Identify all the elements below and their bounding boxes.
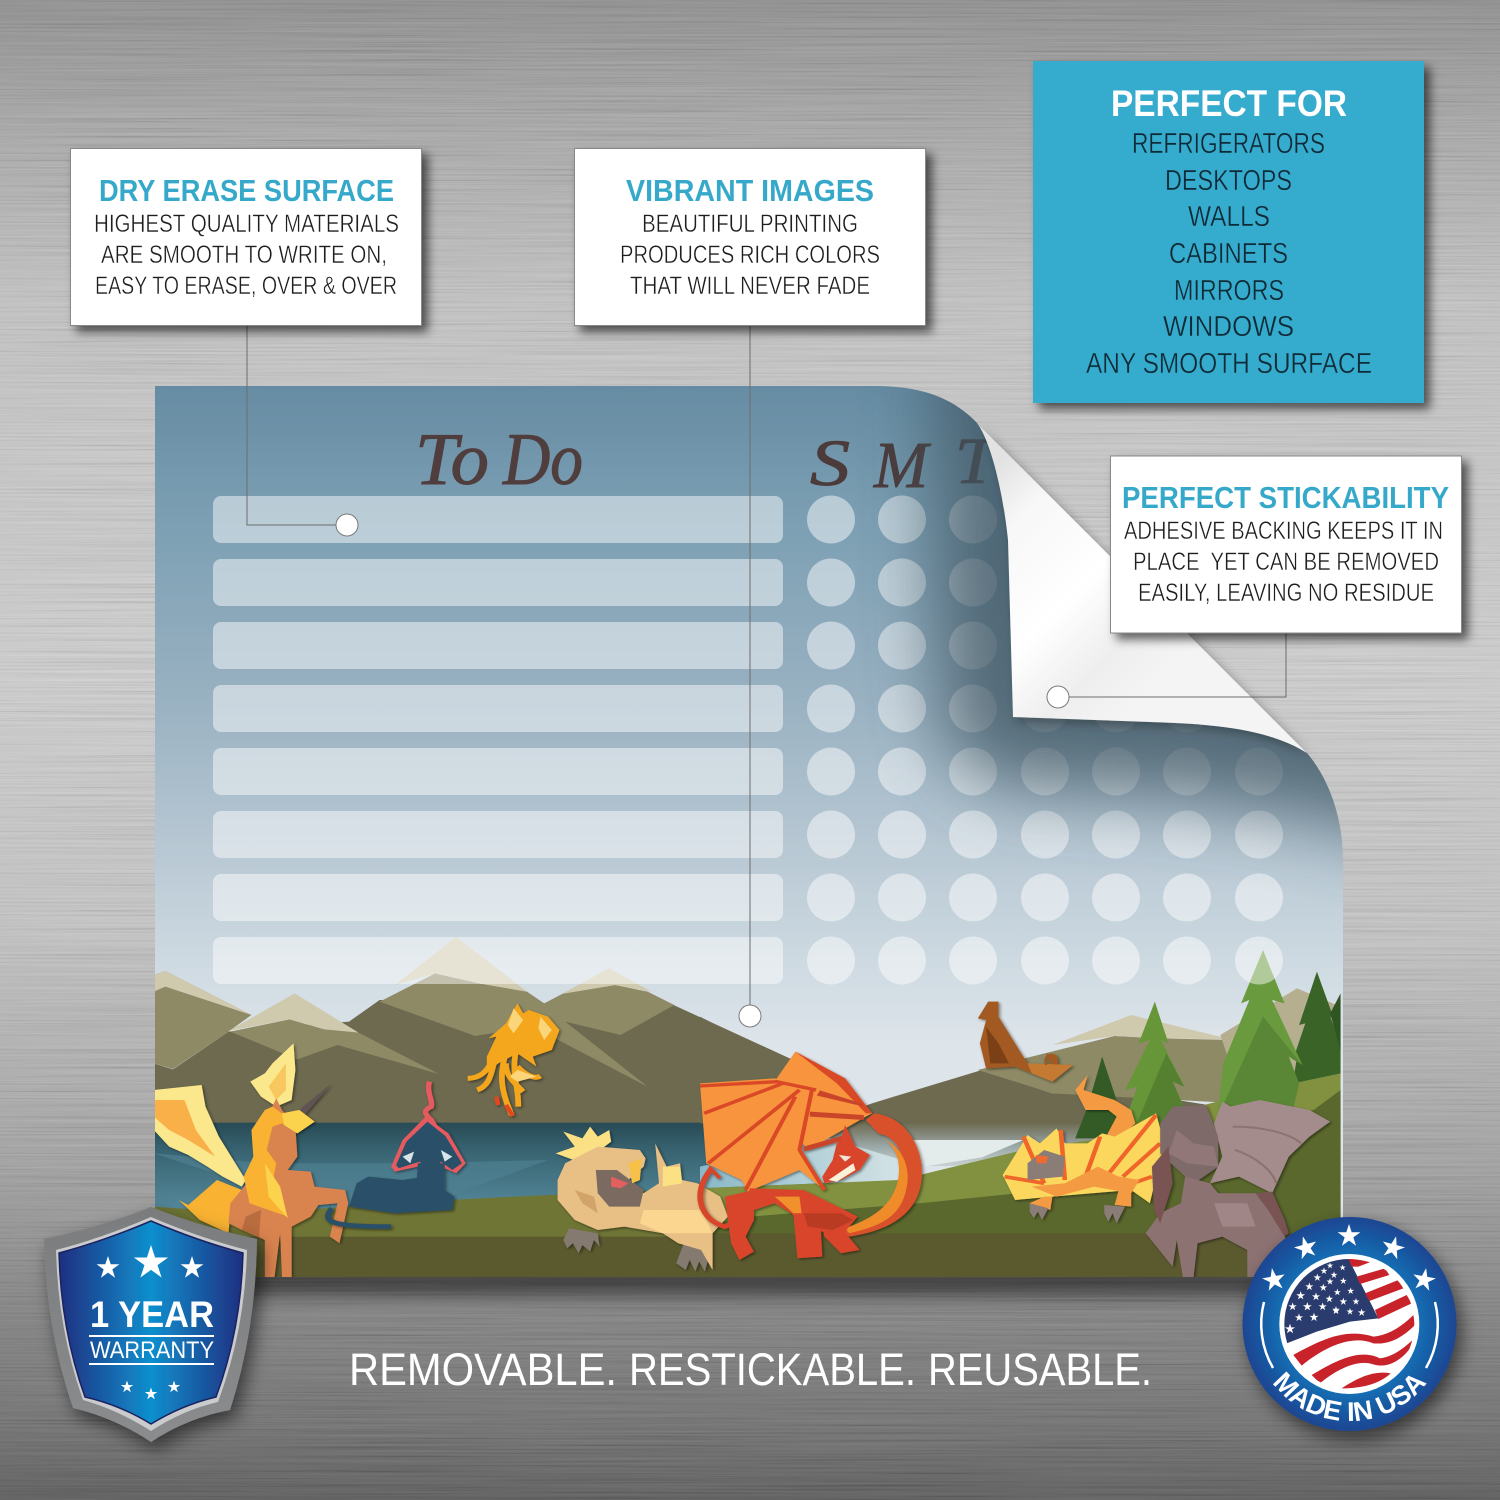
callout: dry erase surface: ARE SMOOTH TO WRITE ON, [101,241,387,269]
badge: made in USA [1237,1213,1472,1448]
tagline: RESTICKABLE. [629,1344,916,1395]
callout: perfect stickability: EASILY, LEAVING NO RESIDUE [1138,579,1434,607]
callout: perfect stickability: PERFECT STICKABILITY [1122,480,1449,515]
callout: dry erase surface: EASY TO ERASE, OVER & OVER [95,272,397,300]
leader line: stickability [1058,633,1286,697]
badge: 1 year warranty [44,1207,257,1442]
callout: perfect for: PERFECT FOR [1111,83,1347,124]
callout: perfect for: MIRRORS [1174,275,1284,307]
callout: perfect for: REFRIGERATORS [1132,128,1325,160]
chart title: To Do: Do [502,419,583,501]
trees [1075,950,1341,1138]
weekday headings: S [810,427,850,500]
weekday headings: T [955,425,1000,498]
callout: dry erase surface [70,148,422,326]
callout: perfect for: ANY SMOOTH SURFACE [1086,348,1372,380]
weekday headings: M [873,429,932,502]
curl shadow on poster [886,388,1343,876]
creature: brown winged horse [1146,1100,1330,1278]
shadow under poster [165,1268,1355,1294]
creature: orange frilled dragon [1003,1075,1164,1223]
badge: made in USA: MADE IN USA [1273,1372,1427,1422]
creature: red and orange dragon [700,1052,922,1260]
leader line: vibrant images [749,325,751,1016]
task rows [213,496,783,984]
callout: perfect for [1033,61,1424,403]
callout: dry erase surface: DRY ERASE SURFACE [99,173,394,208]
callout: perfect for: WALLS [1188,201,1270,233]
badge: 1 year warranty: WARRANTY [90,1337,214,1364]
callout: vibrant images: THAT WILL NEVER FADE [630,272,870,300]
callout: perfect for: WINDOWS [1163,311,1294,343]
tagline: REUSABLE. [928,1344,1152,1395]
panel: to-do chart poster [155,386,1343,1277]
weekday check circles [807,496,1283,984]
badge: 1 year warranty: 1 YEAR [90,1294,214,1335]
callout: perfect stickability [1110,456,1462,633]
marker dot: vibrant images [739,1005,761,1027]
landscape: left and centre mountains, lake, meadow [154,937,843,1280]
callout: perfect for: DESKTOPS [1165,165,1292,197]
creature: golden phoenix [468,1003,559,1116]
landscape: right hills, lake, meadow [700,988,1341,1278]
callout: vibrant images: VIBRANT IMAGES [626,173,874,208]
callout: dry erase surface: HIGHEST QUALITY MATERIALS [94,210,399,238]
creature: dark blue hound with red ears [328,1082,466,1227]
callout: vibrant images: BEAUTIFUL PRINTING [642,210,858,238]
creature: tan spiky beast [556,1127,728,1272]
callout: perfect stickability: PLACE YET CAN BE REMOVED [1133,548,1439,576]
callout: perfect for: CABINETS [1169,238,1288,270]
callout: vibrant images [574,148,926,326]
marker dot: stickability [1047,686,1069,708]
marker dot: dry erase [336,514,358,536]
callout: vibrant images: PRODUCES RICH COLORS [620,241,880,269]
tagline: REMOVABLE. [349,1344,617,1395]
creature: small brown griffin [978,1002,1073,1082]
sky background [155,386,1345,1286]
leader line: dry erase [247,325,347,525]
creature: winged orange unicorn [154,1043,348,1278]
chart title: To Do: To [415,419,489,501]
peeled corner flap [977,423,1307,753]
